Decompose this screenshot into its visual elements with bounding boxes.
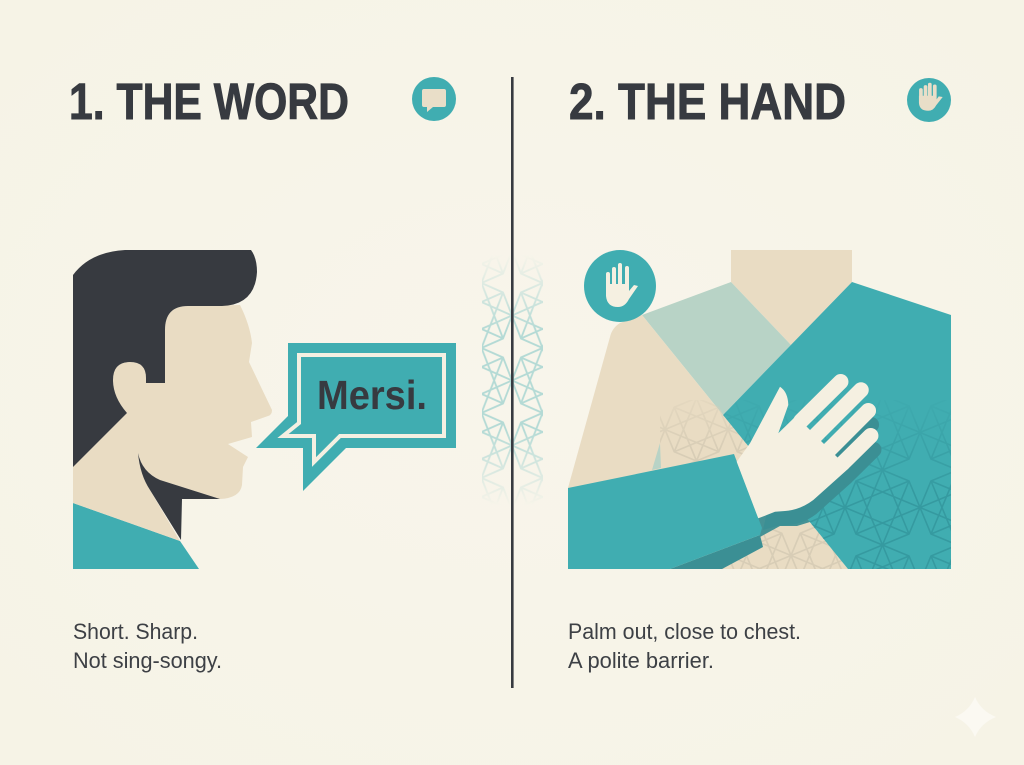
speech bubble: Mersi bbox=[256, 343, 456, 491]
caption: the hand bbox=[568, 619, 801, 673]
teal lattice bbox=[720, 400, 952, 570]
icon: hand badge bbox=[907, 78, 951, 122]
title: 2. The Hand: 2. THE HAND bbox=[569, 73, 846, 130]
sleeve bbox=[568, 454, 762, 569]
collar bbox=[73, 503, 199, 569]
infographic bbox=[71, 77, 995, 736]
caption: the word: Not sing-songy. bbox=[73, 648, 222, 673]
caption: the hand: Palm out, close to chest. bbox=[568, 619, 801, 644]
illustration: hand on chest bbox=[568, 250, 952, 570]
face and neck bbox=[73, 305, 272, 541]
beige lattice bbox=[660, 405, 842, 569]
ornament: divider lattice bbox=[482, 255, 543, 505]
beige robe bbox=[568, 315, 848, 569]
icon: raised palm badge bbox=[584, 250, 656, 322]
mint sliver bbox=[652, 443, 661, 470]
hair bbox=[73, 250, 257, 467]
teal robe bbox=[723, 282, 951, 569]
sparkle bbox=[955, 697, 996, 737]
caption: the hand: A polite barrier. bbox=[568, 648, 714, 673]
title: 1. The Word: 1. THE WORD bbox=[69, 73, 349, 130]
caption: the word bbox=[73, 619, 222, 673]
neck bbox=[731, 250, 852, 345]
illustration: speaking man in profile bbox=[73, 250, 272, 569]
icon: speech bubble badge bbox=[412, 77, 456, 121]
center divider line bbox=[511, 77, 514, 688]
bubble text: Mersi. bbox=[317, 372, 427, 418]
hand shadow bbox=[758, 425, 874, 537]
caption: the word: Short. Sharp. bbox=[73, 619, 198, 644]
neck shadow bbox=[138, 453, 220, 540]
sleeve shadow bbox=[670, 535, 763, 569]
hand bbox=[737, 382, 871, 518]
mint lapel bbox=[642, 282, 791, 415]
